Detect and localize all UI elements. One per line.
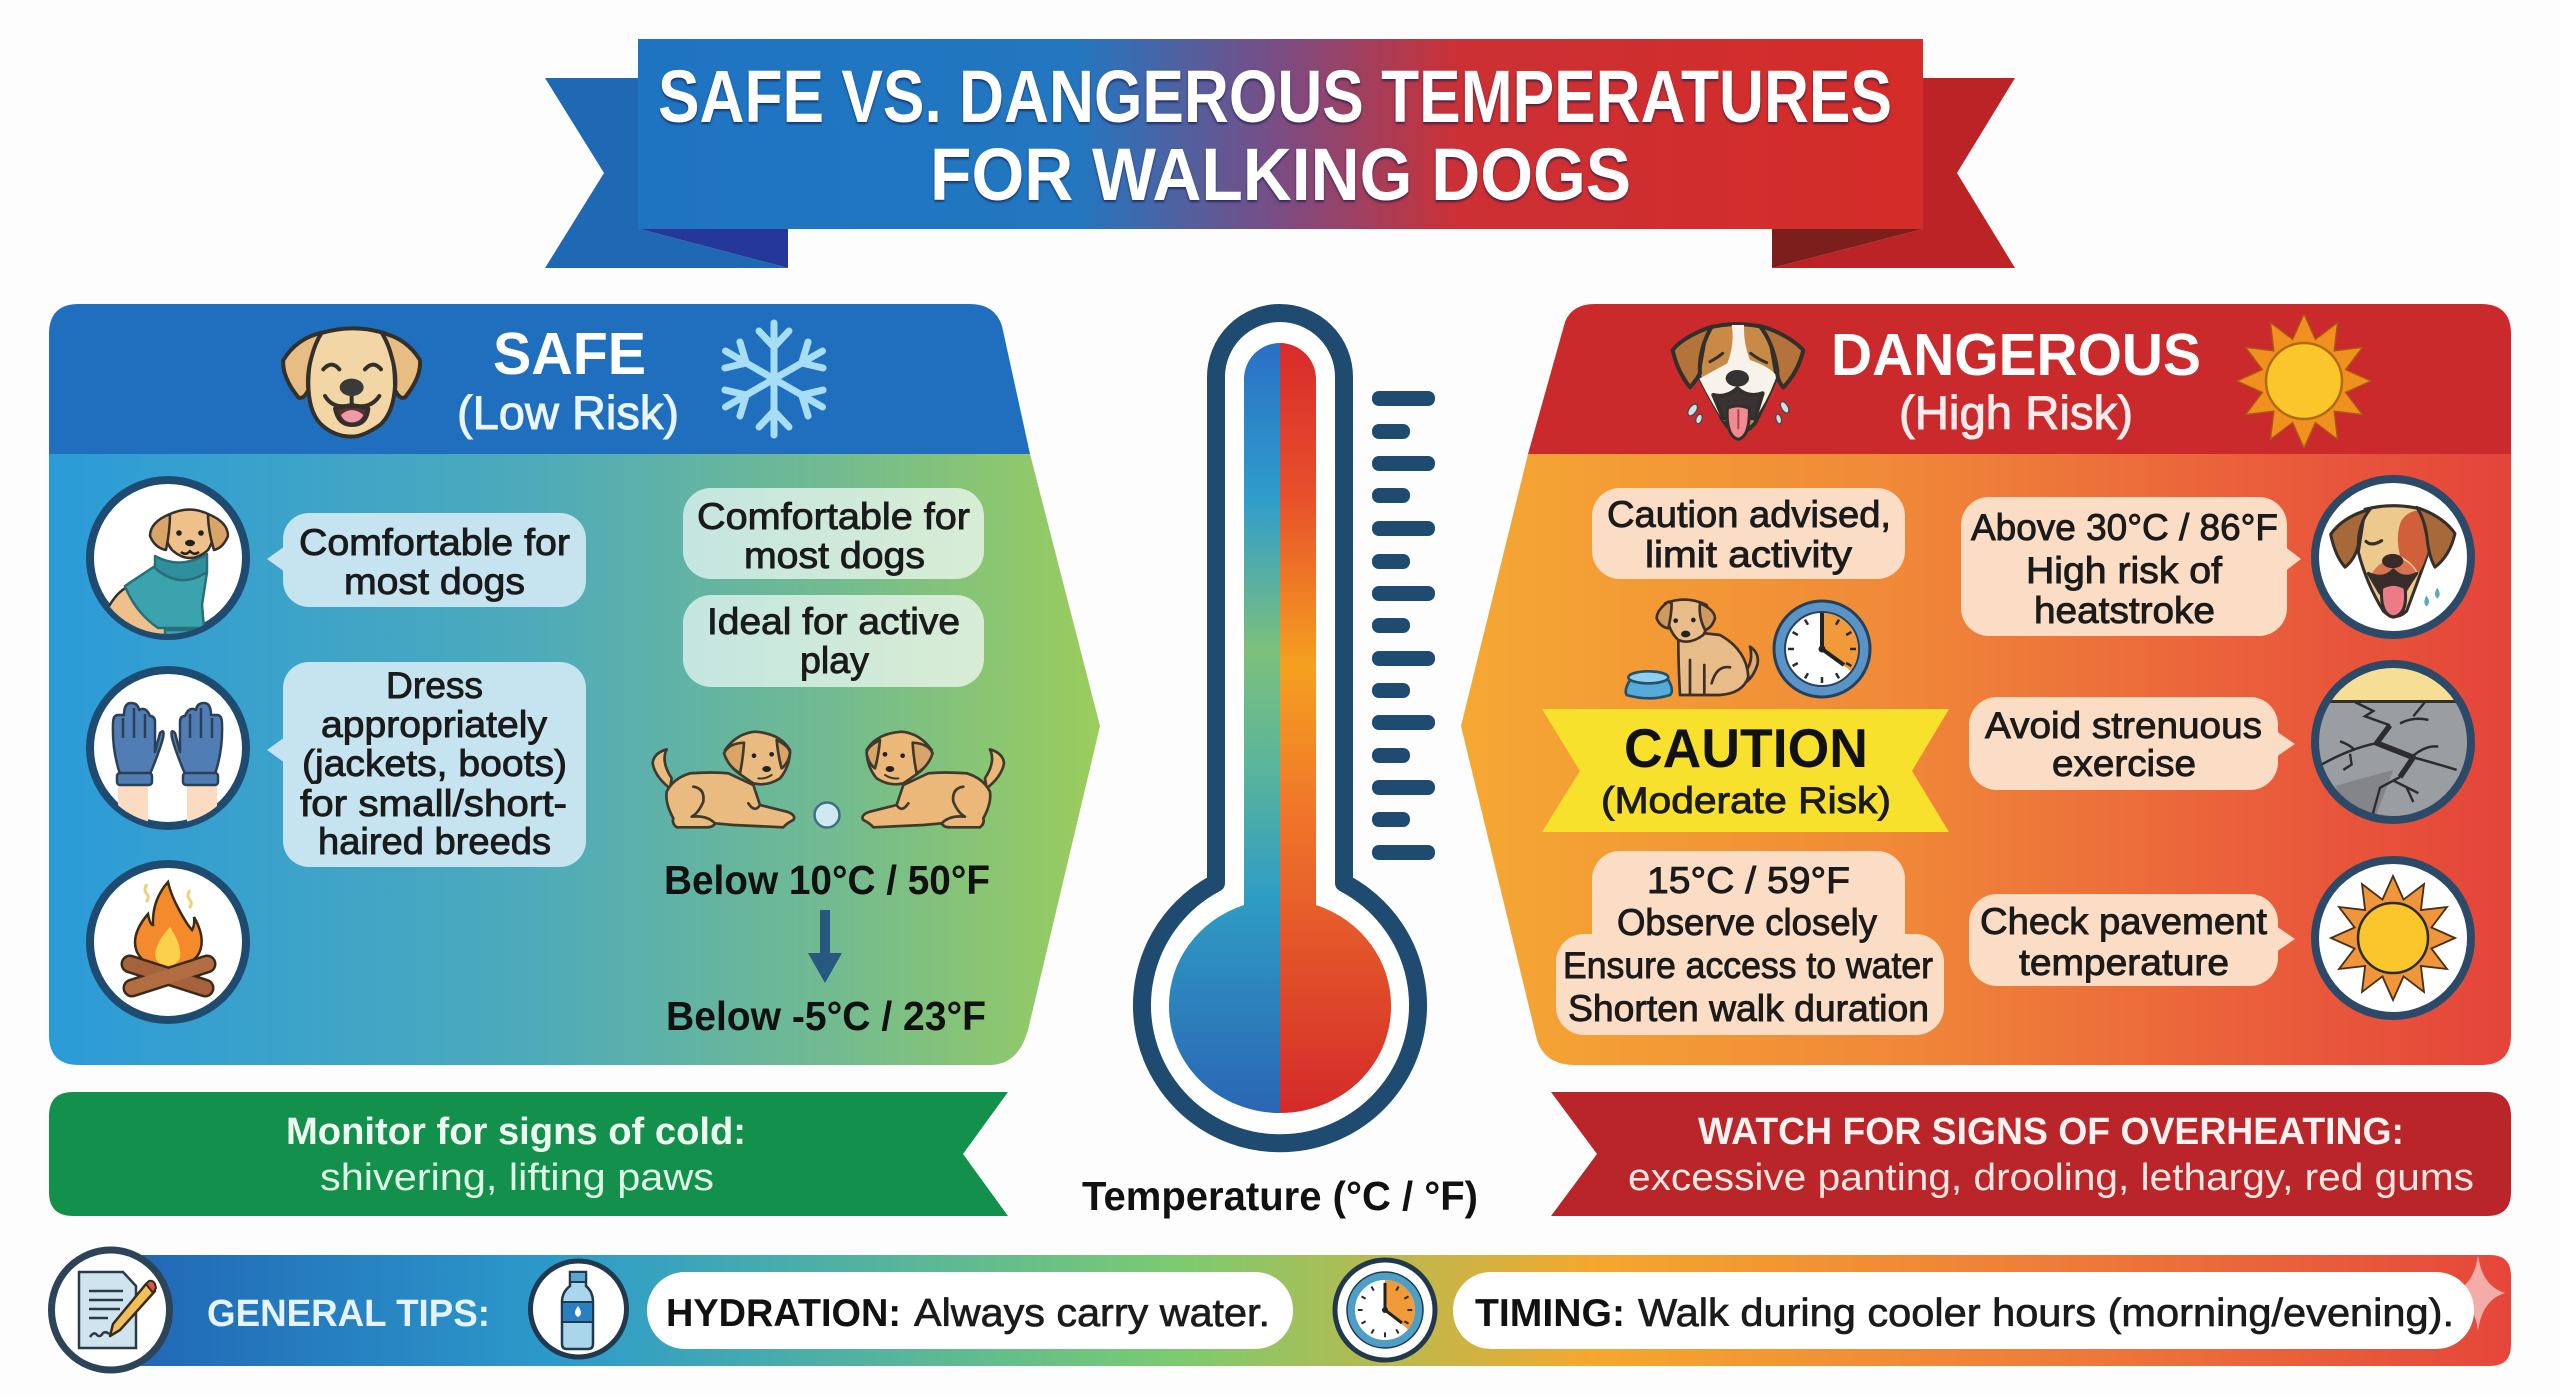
panel: safe <box>49 304 1100 1065</box>
heading: dangerous: (High Risk) <box>1899 386 2133 439</box>
thermometer fill, hot side <box>1280 343 1391 1113</box>
callout: comfortable, right: Comfortable for <box>697 496 970 537</box>
title ribbon <box>545 39 2015 268</box>
ribbon right tail <box>1772 78 2015 268</box>
callout: observe closely: 15°C / 59°F <box>1647 860 1850 901</box>
pill: timing: Walk during cooler hours (morning/evening). <box>1638 1292 2454 1335</box>
callout: avoid strenuous exercise: Avoid strenuous <box>1985 705 2262 746</box>
banner: caution: (Moderate Risk) <box>1601 780 1891 821</box>
callout: dress appropriately: haired breeds <box>318 821 551 862</box>
ribbon left fold <box>640 229 788 268</box>
arrow: down <box>808 910 842 983</box>
callout: check pavement <box>1969 894 2295 986</box>
icon: timing clock <box>1335 1260 1435 1360</box>
title text: FOR WALKING DOGS <box>930 133 1631 216</box>
tips gradient band <box>90 1255 2511 1366</box>
callout: dress appropriately <box>267 662 586 867</box>
callout: observe closely: Shorten walk duration <box>1568 988 1929 1029</box>
banner: signs of overheating: WATCH FOR SIGNS OF OVERHEATING: <box>1698 1111 2404 1153</box>
thermometer glass <box>1142 313 1418 1143</box>
banner: signs of cold: shivering, lifting paws <box>320 1157 714 1199</box>
icon: dog in sweater <box>90 480 246 640</box>
callout: avoid strenuous exercise <box>1969 697 2295 790</box>
icon: panting dog <box>1673 324 1803 439</box>
callout: comfortable, left: most dogs <box>344 561 525 602</box>
callout: avoid strenuous exercise: exercise <box>2052 743 2196 784</box>
icon: water bottle <box>530 1261 626 1357</box>
callout: observe closely <box>1556 851 1944 1035</box>
callout: ideal for active play: Ideal for active <box>707 601 960 642</box>
icon: header sun <box>2237 314 2371 448</box>
callout: dress appropriately: (jackets, boots) <box>302 743 567 784</box>
callout: comfortable, right <box>683 488 984 579</box>
pill: hydration: Always carry water. <box>914 1292 1270 1335</box>
general tips bar <box>52 1250 2511 1370</box>
banner: signs of cold <box>49 1092 1008 1216</box>
heading: safe <box>457 321 679 439</box>
banner: caution <box>1542 709 1949 832</box>
callout: check pavement: Check pavement <box>1980 901 2268 942</box>
banner: signs of overheating <box>1551 1092 2511 1216</box>
ribbon main band <box>638 39 1923 229</box>
icon: gloves <box>90 670 246 826</box>
panel: dangerous <box>1461 304 2511 1065</box>
callout: comfortable, left: Comfortable for <box>299 522 570 563</box>
title text: SAFE VS. DANGEROUS TEMPERATURES <box>658 55 1892 138</box>
ball <box>814 802 840 828</box>
pill: hydration <box>647 1272 1293 1349</box>
banner: caution: CAUTION <box>1624 717 1868 779</box>
thermometer label: Temperature (°C / °F) <box>1082 1173 1478 1219</box>
safe panel body <box>49 454 1100 1065</box>
callout: above 30C: High risk of <box>2026 550 2223 591</box>
safe temperature 2: Below -5°C / 23°F <box>666 993 986 1039</box>
icon: campfire <box>90 864 246 1020</box>
callout: observe closely: Ensure access to water <box>1563 945 1933 986</box>
ribbon right fold <box>1772 229 1923 268</box>
callout: dress appropriately: appropriately <box>321 704 548 745</box>
pill: timing <box>1453 1272 2474 1349</box>
icon: puppies with ball <box>653 732 1004 828</box>
thermometer fill, cold side <box>1169 343 1280 1113</box>
icon: notepad <box>52 1250 170 1370</box>
callout: check pavement: temperature <box>2019 942 2229 983</box>
callout: above 30C <box>1961 497 2301 636</box>
heading: dangerous <box>1831 322 2201 439</box>
dangerous panel body <box>1461 454 2511 1065</box>
icon: sun in circle <box>2315 860 2471 1016</box>
pill: timing: TIMING: <box>1475 1292 1625 1335</box>
pill: hydration: HYDRATION: <box>666 1292 901 1335</box>
callout: ideal for active play <box>683 595 984 687</box>
ribbon left tail <box>545 78 788 268</box>
safe temperature 1: Below 10°C / 50°F <box>664 857 990 903</box>
icon: happy dog <box>283 328 420 437</box>
heading: dangerous: DANGEROUS <box>1831 322 2201 388</box>
callout: caution advised <box>1592 488 1905 579</box>
banner: signs of cold: Monitor for signs of cold: <box>286 1111 746 1153</box>
title text <box>658 55 1892 216</box>
icon: cracked pavement <box>2310 660 2480 820</box>
heading: safe: SAFE <box>493 321 646 387</box>
right puppy <box>862 732 1004 827</box>
callout: dress appropriately: Dress <box>386 665 483 706</box>
banner: signs of overheating: excessive panting, drooling, lethargy, red gums <box>1628 1157 2474 1199</box>
callout: comfortable, right: most dogs <box>744 535 925 576</box>
icon: sitting dog with bowl <box>1626 600 1758 698</box>
icon: overheated dog <box>2315 479 2471 635</box>
icon: clock <box>1774 601 1870 697</box>
heading: safe: (Low Risk) <box>457 386 679 439</box>
icon: snowflake <box>718 323 830 435</box>
callout: above 30C: Above 30°C / 86°F <box>1971 507 2278 548</box>
callout: caution advised: limit activity <box>1645 534 1853 575</box>
thermometer ticks <box>1372 391 1435 860</box>
callout: comfortable, left <box>267 513 586 607</box>
sparkle <box>2451 1255 2505 1331</box>
dangerous panel header <box>1528 304 2511 454</box>
safe panel header <box>49 304 1030 454</box>
heading: general tips: GENERAL TIPS: <box>207 1293 490 1335</box>
thermometer <box>1142 313 1435 1143</box>
callout: ideal for active play: play <box>800 640 869 681</box>
callout: observe closely: Observe closely <box>1617 902 1877 943</box>
left puppy <box>653 732 794 827</box>
callout: caution advised: Caution advised, <box>1607 494 1891 535</box>
callout: dress appropriately: for small/short- <box>300 783 567 824</box>
callout: above 30C: heatstroke <box>2034 590 2215 631</box>
